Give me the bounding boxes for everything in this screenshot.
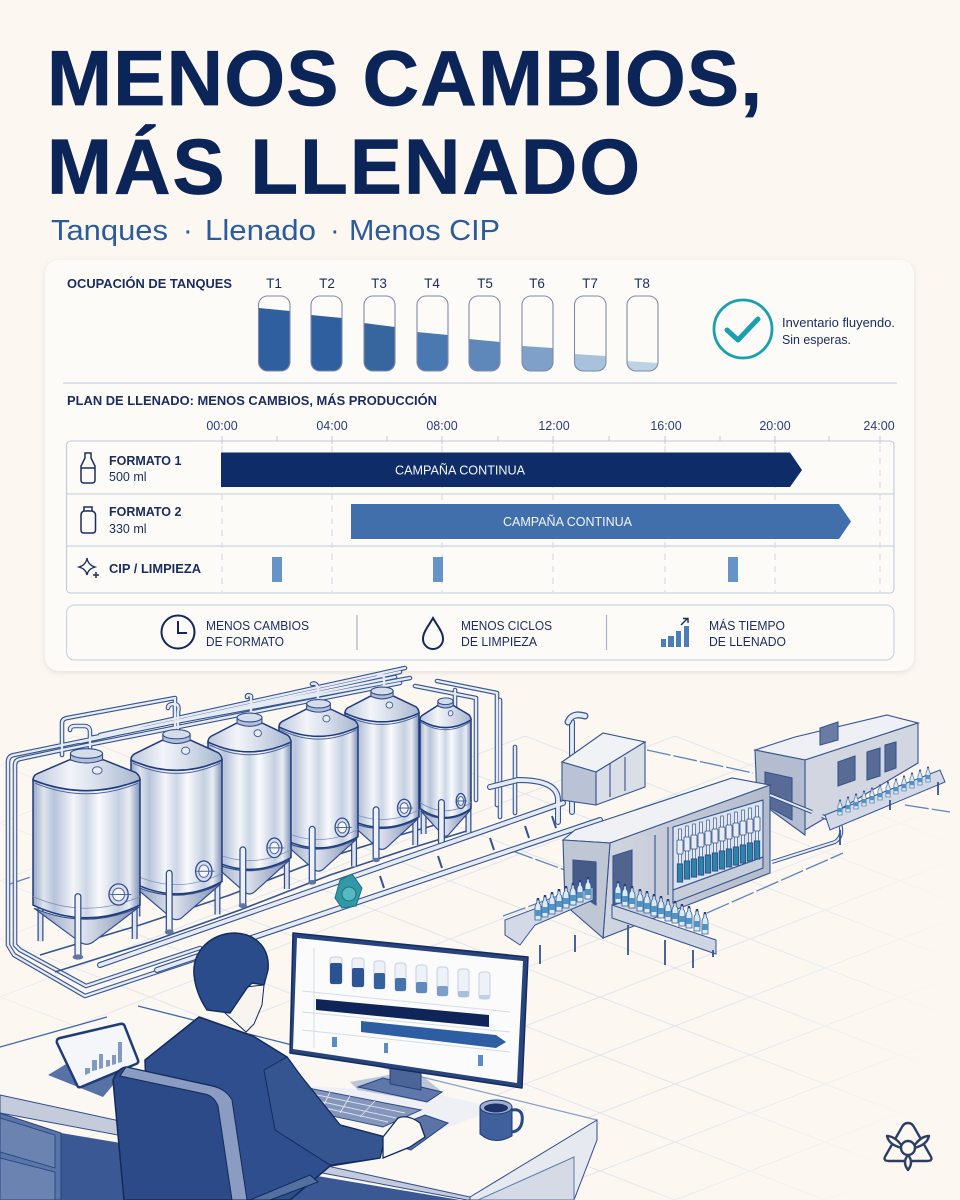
illustration: monitor [290, 933, 528, 1102]
icon: check circle [714, 300, 772, 358]
icon: teal pump [335, 874, 362, 908]
office chair [113, 1067, 245, 1200]
chart: tank levels: T5 [477, 276, 493, 291]
chart: tank levels: T6 [529, 276, 545, 291]
illustration: tank support frames [40, 815, 470, 972]
benefit: fewer format changes [162, 616, 309, 649]
illustration: operator at desk [113, 933, 425, 1200]
chart: tank levels: T1 [266, 276, 282, 291]
title [47, 34, 762, 210]
panel: dashboard card [45, 260, 914, 671]
bar: format 2 campaign: CAMPAÑA CONTINUA [503, 515, 633, 529]
illustration: desk [0, 1006, 597, 1200]
time axis: 24:00 [863, 419, 895, 433]
row label: format 1: 500 ml [109, 470, 147, 484]
subtitle: · [330, 215, 340, 247]
heading: filling plan: PLAN DE LLENADO: MENOS CAMBIOS, MÁS PRODUCCIÓN [67, 393, 437, 408]
illustration: piping behind tanks [8, 668, 515, 996]
benefit: fewer cleaning cycles: DE LIMPIEZA [461, 635, 538, 649]
bar: format 2 campaign [351, 504, 851, 539]
bar: format 1 campaign [221, 452, 802, 487]
time axis [206, 419, 895, 433]
illustration: storage tanks [33, 687, 471, 960]
chart: tank levels: T3 [371, 276, 387, 291]
illustration: front piping [100, 715, 600, 970]
chart: tank levels: T7 [582, 276, 598, 291]
time axis: 00:00 [206, 419, 238, 433]
illustration: factory floor grid [0, 736, 960, 1200]
callout: inventory flowing: Sin esperas. [782, 333, 851, 347]
subtitle: Tanques [51, 215, 168, 247]
time axis: 12:00 [538, 419, 570, 433]
benefit: more filling time [661, 618, 786, 649]
row label: format 1 [81, 453, 182, 484]
benefit: more filling time: MÁS TIEMPO [709, 618, 785, 633]
operator: hand [383, 1117, 425, 1158]
row label: format 2: FORMATO 2 [109, 505, 182, 519]
bar: format 1 campaign: CAMPAÑA CONTINUA [395, 464, 526, 478]
callout: inventory flowing: Inventario fluyendo. [782, 316, 895, 330]
operator: torso [145, 1017, 385, 1200]
chart: tank levels: T8 [634, 276, 650, 291]
illustration: mug [480, 1100, 522, 1141]
chart: tank levels: T4 [424, 276, 440, 291]
row label: CIP [79, 558, 201, 578]
time axis: 04:00 [316, 419, 348, 433]
title: MENOS CAMBIOS, [47, 34, 762, 122]
row label: format 2: 330 ml [109, 522, 147, 536]
time axis: 08:00 [426, 419, 458, 433]
operator: arm [264, 1057, 385, 1165]
gantt chart: filling schedule [66, 419, 895, 593]
time axis: 20:00 [759, 419, 791, 433]
benefit: fewer format changes: DE FORMATO [206, 635, 284, 649]
subtitle: Menos CIP [349, 215, 500, 247]
illustration: filling machine [563, 778, 770, 938]
benefit: fewer cleaning cycles: MENOS CICLOS [461, 619, 552, 633]
illustration: connecting pipe to filler [770, 795, 841, 862]
row label: CIP: CIP / LIMPIEZA [109, 562, 201, 576]
illustration: labeller machine [755, 715, 918, 835]
illustration: conveyors and bottles [505, 767, 945, 968]
heading: tank occupancy: OCUPACIÓN DE TANQUES [67, 276, 232, 291]
benefit: more filling time: DE LLENADO [709, 635, 786, 649]
chart: tank levels: T2 [319, 276, 335, 291]
row label: format 1: FORMATO 1 [109, 454, 182, 468]
operator: neck and ear [225, 985, 264, 1032]
icon: brand logo [885, 1123, 931, 1170]
subtitle: Llenado [205, 215, 316, 247]
operator: hair [194, 933, 268, 1013]
illustration: keyboard and mouse pad [308, 1088, 448, 1150]
subtitle: · [183, 215, 193, 247]
benefit: fewer cleaning cycles [423, 618, 552, 649]
benefit: fewer format changes: MENOS CAMBIOS [206, 619, 309, 633]
row label: format 2 [81, 505, 182, 536]
monitor screen: mini dashboard [302, 948, 510, 1066]
callout: inventory flowing [782, 316, 895, 347]
panel: benefits strip [66, 605, 894, 660]
bars: CIP cleaning [272, 557, 738, 582]
title: MÁS LLENADO [47, 122, 640, 210]
subtitle [51, 215, 500, 247]
illustration: CIP unit [562, 733, 645, 805]
time axis: 16:00 [650, 419, 682, 433]
chart: tank levels [258, 276, 658, 371]
illustration: tablet [48, 1024, 138, 1097]
